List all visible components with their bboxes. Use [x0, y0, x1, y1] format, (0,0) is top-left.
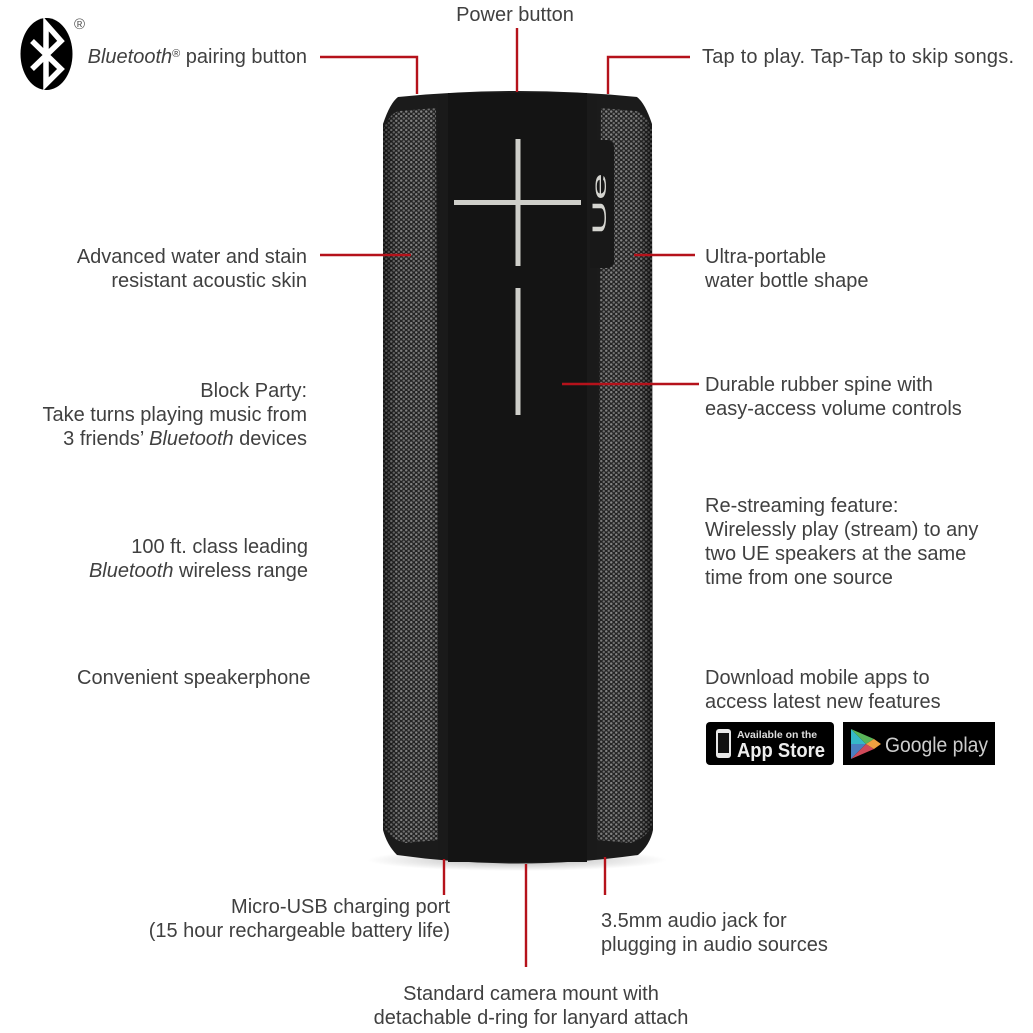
shape label: water bottle shape — [704, 270, 868, 292]
re-streaming: Wirelessly play (stream) to any — [705, 519, 978, 541]
google play badge — [843, 722, 995, 765]
skin label: resistant acoustic skin — [111, 270, 307, 292]
shape label: Ultra-portable — [705, 246, 826, 268]
spine label: easy-access volume controls — [705, 398, 962, 420]
bluetooth pairing label: pairing button — [180, 46, 307, 68]
plus button — [454, 139, 581, 266]
usb label: (15 hour rechargeable battery life) — [149, 920, 450, 942]
speaker body — [383, 91, 653, 864]
ground shadow — [367, 849, 667, 871]
bluetooth pairing label: Bluetooth — [88, 46, 172, 68]
audio jack label: plugging in audio sources — [601, 934, 828, 956]
apps label: access latest new features — [705, 691, 941, 713]
range: 100 ft. class leading — [131, 536, 308, 558]
app store badge: Available on the — [737, 729, 817, 741]
speaker — [367, 91, 667, 871]
camera mount label: detachable d-ring for lanyard attach — [374, 1007, 688, 1029]
app store badge — [706, 722, 834, 765]
app store badge: App Store — [737, 740, 825, 762]
UE logo: Ue — [590, 173, 611, 235]
spine label: Durable rubber spine with — [705, 374, 933, 396]
re-streaming: time from one source — [705, 567, 893, 589]
camera mount label: Standard camera mount with — [403, 983, 659, 1005]
usb label: Micro-USB charging port — [231, 896, 450, 918]
re-streaming: Re-streaming feature: — [705, 495, 898, 517]
skin label: Advanced water and stain — [77, 246, 307, 268]
right fabric — [597, 108, 652, 843]
minus button — [516, 288, 520, 415]
block party: 3 friends’ Bluetooth devices — [63, 428, 307, 450]
logo tab — [590, 140, 614, 268]
range: Bluetooth wireless range — [89, 560, 308, 582]
left fabric — [383, 108, 439, 843]
re-streaming: two UE speakers at the same — [705, 543, 966, 565]
tap to play label: Tap to play. Tap-Tap to skip songs. — [702, 46, 1014, 68]
callout lines — [320, 28, 699, 967]
block party: Block Party: — [200, 380, 307, 402]
apps label: Download mobile apps to — [705, 667, 930, 689]
bluetooth pairing label: ® — [172, 48, 180, 60]
registered mark: ® — [74, 16, 85, 33]
block party: Take turns playing music from — [42, 404, 307, 426]
icon: bluetooth — [20, 16, 85, 90]
audio jack label: 3.5mm audio jack for — [601, 910, 787, 932]
rubber spine — [448, 93, 587, 862]
speakerphone: Convenient speakerphone — [77, 667, 311, 689]
power button label: Power button — [456, 4, 574, 26]
google play badge: Google play — [885, 734, 988, 757]
